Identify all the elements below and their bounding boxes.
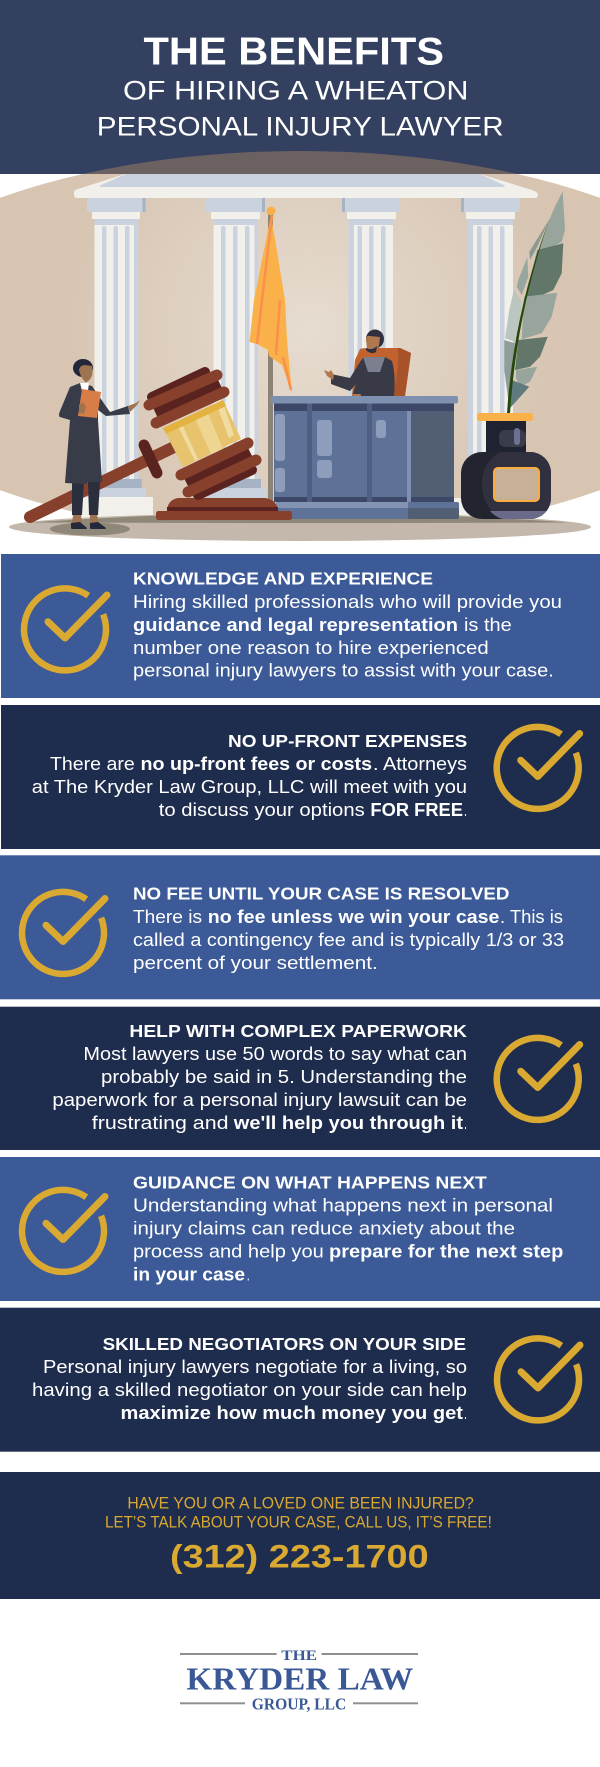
panel: help with complex paperwork [0,1007,600,1150]
ink bottle [461,413,551,519]
text block: is the [464,615,512,635]
text block: in your case [133,1265,245,1285]
logo: The Kryder Law Group: GROUP, LLC [252,1694,346,1713]
text block: no fee unless we win your case [208,907,499,927]
text block: . Attorneys [373,754,467,774]
text block: prepare for the next step [329,1242,563,1262]
text block: NO FEE UNTIL YOUR CASE IS RESOLVED [133,884,509,904]
call to action text: LET’S TALK ABOUT YOUR CASE, CALL US, IT’S FREE! [105,1513,492,1532]
title: PERSONAL INJURY LAWYER [97,112,504,142]
temple roof beam [74,174,538,198]
columns [80,198,520,518]
text block: GUIDANCE ON WHAT HAPPENS NEXT [133,1173,487,1193]
text block: HELP WITH COMPLEX PAPERWORK [129,1021,467,1041]
icon: check circle [497,727,580,809]
feather quill [504,192,565,413]
text block: injury claims can reduce anxiety about the [133,1219,515,1239]
title: OF HIRING A WHEATON [123,75,468,105]
text block: having a skilled negotiator on your side can help [32,1380,467,1400]
text block: process and help you [133,1242,324,1262]
text block [133,569,562,681]
gavel [30,372,292,520]
text block [52,1021,467,1133]
text block: Understanding what happens next in personal [133,1196,553,1216]
call to action text [105,1494,492,1532]
text block: called a contingency fee and is typically 1/3 or 33 [133,930,564,950]
icon: check circle [22,1190,105,1272]
text block: maximize how much money you get [120,1403,463,1423]
text block: Personal injury lawyers negotiate for a living, so [43,1357,467,1377]
text block: . [464,1403,467,1423]
text block [133,884,564,973]
text block: personal injury lawyers to assist with your case. [133,661,554,681]
text block: percent of your settlement. [133,953,378,973]
text block: no up-front fees or costs [140,754,372,774]
judge's bench [271,396,459,519]
panel: no fee until your case is resolved [0,855,600,999]
call to action panel [0,1472,600,1599]
text block [32,731,468,820]
text block: at The Kryder Law Group, LLC will meet with you [32,777,467,797]
lawyer figure [59,359,140,529]
header banner [0,0,600,174]
icon: check circle [497,1338,580,1420]
text block: SKILLED NEGOTIATORS ON YOUR SIDE [103,1334,466,1354]
title [97,31,504,142]
flag [250,206,292,504]
call to action text: HAVE YOU OR A LOVED ONE BEEN INJURED? [127,1494,474,1513]
ground shadow [9,513,591,541]
panel: guidance on what happens next [0,1157,600,1301]
text block: . This is [500,907,563,927]
text block [32,1334,467,1423]
icon: check circle [497,1038,580,1120]
text block: number one reason to hire experienced [133,638,489,658]
text block: . [464,1113,467,1133]
text block: probably be said in 5. Understanding the [101,1067,467,1087]
panel: no up-front expenses [1,705,600,849]
text block: paperwork for a personal injury lawsuit can be [52,1090,467,1110]
text block: we'll help you through it [233,1113,463,1133]
text block: frustrating and [92,1113,228,1133]
logo: The Kryder Law Group: THE [281,1648,317,1664]
icon: check circle [22,892,105,974]
text block: guidance and legal representation [133,615,458,635]
panel: skilled negotiators on your side [0,1308,600,1452]
icon: check circle [24,588,107,670]
text block: to discuss your options [159,800,365,820]
text block: There are [50,754,135,774]
logo: The Kryder Law Group: KRYDER LAW [186,1660,413,1696]
title: THE BENEFITS [144,31,444,74]
illustration: courthouse scene [0,151,600,541]
text block: Hiring skilled professionals who will provide you [133,592,562,612]
phone number: (312) 223-1700 [170,1538,429,1574]
text block: . [464,800,467,820]
panel: knowledge and experience [1,554,600,698]
text block [133,1173,563,1285]
text block: . [247,1265,250,1285]
text block: Most lawyers use 50 words to say what can [83,1044,467,1064]
text block: There is [133,907,202,927]
judge [324,330,411,397]
logo: The Kryder Law Group [180,1648,418,1713]
text block: FOR FREE [370,800,463,820]
text block: NO UP-FRONT EXPENSES [228,731,468,751]
text block: KNOWLEDGE AND EXPERIENCE [133,569,433,589]
